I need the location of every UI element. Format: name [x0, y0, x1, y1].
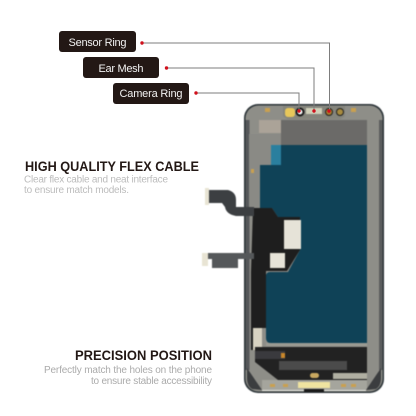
upper cable tip	[205, 188, 209, 205]
bottom slot	[304, 389, 324, 392]
label: ear mesh: Ear Mesh	[98, 63, 144, 75]
callout lines	[142, 43, 330, 110]
phone outer frame	[244, 104, 384, 393]
callout dots	[140, 41, 331, 113]
heading: flex cable: HIGH QUALITY FLEX CABLE	[25, 159, 199, 174]
upper shield panel	[281, 120, 367, 145]
label: camera ring: Camera Ring	[120, 88, 182, 100]
upper cable body	[209, 190, 254, 216]
label: sensor ring: Sensor Ring	[68, 37, 126, 49]
small gold tab	[281, 353, 285, 358]
text: flex cable description: Clear flex cable and neat interface	[24, 174, 168, 186]
metal bracket	[333, 373, 367, 379]
text: flex cable description	[24, 174, 168, 196]
gold ring	[336, 108, 344, 116]
left shield panel	[249, 134, 281, 208]
flex cable upper	[205, 188, 254, 216]
white connector top	[284, 220, 301, 249]
left edge band	[246, 120, 250, 370]
sensor ring line	[142, 43, 330, 110]
text: flex cable description: to ensure match models.	[24, 185, 129, 196]
gold oval	[310, 373, 319, 378]
bottom metal strip	[262, 380, 367, 390]
blue display panel	[260, 145, 367, 343]
light blue corner	[271, 145, 281, 170]
bottom white edge	[262, 390, 366, 391]
corner dark right	[366, 368, 381, 390]
sensor notch bar	[283, 106, 345, 119]
right edge band	[379, 120, 382, 370]
flex cable lower	[202, 253, 254, 268]
label: camera ring	[113, 83, 189, 104]
yellow sensor pad	[285, 108, 295, 117]
phone inner metal plate	[246, 106, 382, 392]
gold connector	[298, 382, 330, 388]
lower cable body	[208, 253, 254, 268]
panel lower lip	[266, 343, 367, 346]
text: precision description: to ensure stable accessibility	[91, 376, 212, 387]
bottom black board	[255, 347, 367, 380]
gold pads bottom	[251, 108, 356, 387]
camera ring	[296, 108, 304, 116]
phone screen assembly	[244, 104, 384, 393]
text: precision description: Perfectly match the holes on the phone	[44, 365, 212, 376]
camera ring line	[196, 93, 299, 110]
dark flex strip	[255, 351, 285, 359]
ear mesh line	[167, 68, 314, 110]
grey strip	[279, 361, 347, 370]
corner dark left	[247, 368, 262, 390]
sensor ring	[326, 108, 332, 116]
ear mesh	[306, 108, 322, 114]
tape patch	[259, 120, 281, 133]
white connector lower	[270, 253, 285, 268]
text: precision description	[44, 365, 212, 387]
heading: precision position: PRECISION POSITION	[75, 348, 212, 363]
white connector left	[253, 328, 262, 350]
label: ear mesh	[83, 57, 159, 78]
lower cable tip	[202, 253, 208, 266]
black flex board	[251, 208, 300, 350]
label: sensor ring	[59, 31, 136, 52]
